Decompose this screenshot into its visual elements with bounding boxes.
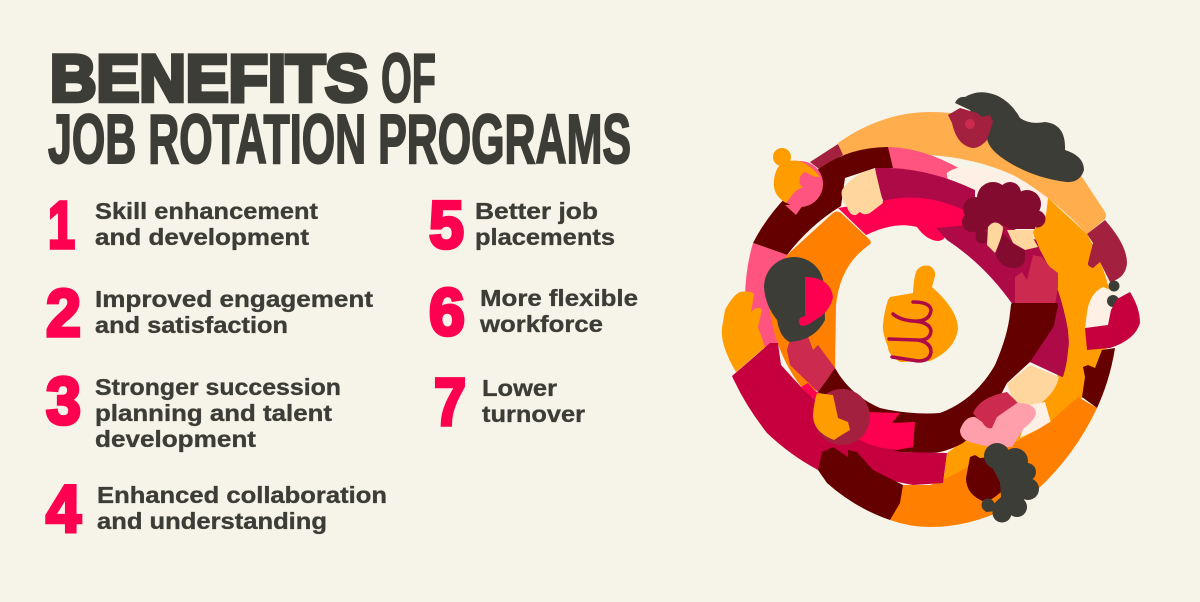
item 3 <box>46 364 341 452</box>
ring: amber left hand <box>722 291 765 372</box>
item 3: 3 <box>46 364 81 439</box>
item 4: 4 <box>46 472 81 547</box>
item 2: 2 <box>46 276 81 351</box>
item 5 <box>429 188 615 263</box>
person: lower-left head <box>813 389 870 445</box>
ring: rose sleeve top <box>875 168 975 220</box>
person: right head <box>1085 280 1140 350</box>
item 6: workforce <box>479 311 603 337</box>
hand: rose left <box>787 336 835 392</box>
ring: maroon right sliver <box>1082 348 1115 408</box>
item 7: Lower <box>482 375 557 401</box>
ring: crimson band <box>838 197 970 241</box>
ring: peach arm lower right <box>1007 365 1059 407</box>
item 1: and development <box>95 224 309 250</box>
item 3: Stronger succession <box>95 374 341 400</box>
person: top-left head <box>773 148 823 215</box>
ring: cream patch <box>1020 402 1051 438</box>
cuff: maroon <box>1011 303 1058 309</box>
ring: pink left <box>745 243 790 348</box>
item 2: Improved engagement <box>95 286 373 312</box>
item 2: and satisfaction <box>95 312 288 338</box>
person: plum beard <box>996 233 1025 268</box>
item 7 <box>434 365 585 440</box>
item 4: Enhanced collaboration <box>97 482 387 508</box>
ring: rose arm right <box>936 222 1068 377</box>
item 6: More flexible <box>480 285 638 311</box>
person: left head <box>764 257 833 342</box>
hand: dark rose right <box>1087 220 1127 282</box>
ring: maroon arm top-left <box>753 147 893 255</box>
item 5: placements <box>475 224 615 250</box>
item 7: 7 <box>434 365 466 440</box>
ring: cream band <box>947 167 1048 235</box>
item 5: Better job <box>475 198 598 224</box>
ring: dark rose sleeve <box>810 144 843 169</box>
ring: orange bottom arm <box>890 397 1097 527</box>
illustration: ring of people <box>722 92 1140 527</box>
ring: crimson big arm left <box>732 343 947 485</box>
title: BENEFITS <box>50 41 368 115</box>
item 1: Skill enhancement <box>95 198 318 224</box>
item 3: development <box>95 426 256 452</box>
item 4: and understanding <box>97 508 327 534</box>
person: top cheek <box>965 119 975 129</box>
icon: thumbs up <box>883 266 958 362</box>
ring: light orange arm <box>838 112 1106 234</box>
item 4 <box>46 472 387 547</box>
hand: rose top right <box>1015 255 1058 305</box>
ring: peach hand <box>842 169 883 215</box>
ring: pink arm top <box>888 147 975 185</box>
person: plum curly hair <box>962 182 1046 244</box>
person: top face <box>948 108 993 148</box>
hand: maroon lower <box>818 447 903 520</box>
ring: rose sleeve lower right <box>1030 305 1069 377</box>
ring: orange arm left <box>768 212 871 397</box>
ring: amber right <box>943 198 1112 484</box>
item 1: 1 <box>48 188 75 263</box>
item 2 <box>46 276 373 351</box>
person: peach face <box>987 222 1038 253</box>
person: top hair <box>955 92 1084 182</box>
item 7: turnover <box>482 401 585 427</box>
title: OF <box>381 39 436 117</box>
item 6: 6 <box>429 275 465 350</box>
item 3: planning and talent <box>95 400 332 426</box>
ring: crimson lower hand <box>801 383 915 450</box>
person: bottom head <box>966 443 1039 522</box>
item 5: 5 <box>429 188 464 263</box>
person: lower-right head <box>960 392 1036 447</box>
item 1 <box>48 188 318 263</box>
title <box>48 39 631 178</box>
item 6 <box>429 275 638 350</box>
ring: maroon ring lower <box>818 305 1058 453</box>
title: JOB ROTATION PROGRAMS <box>48 100 631 178</box>
